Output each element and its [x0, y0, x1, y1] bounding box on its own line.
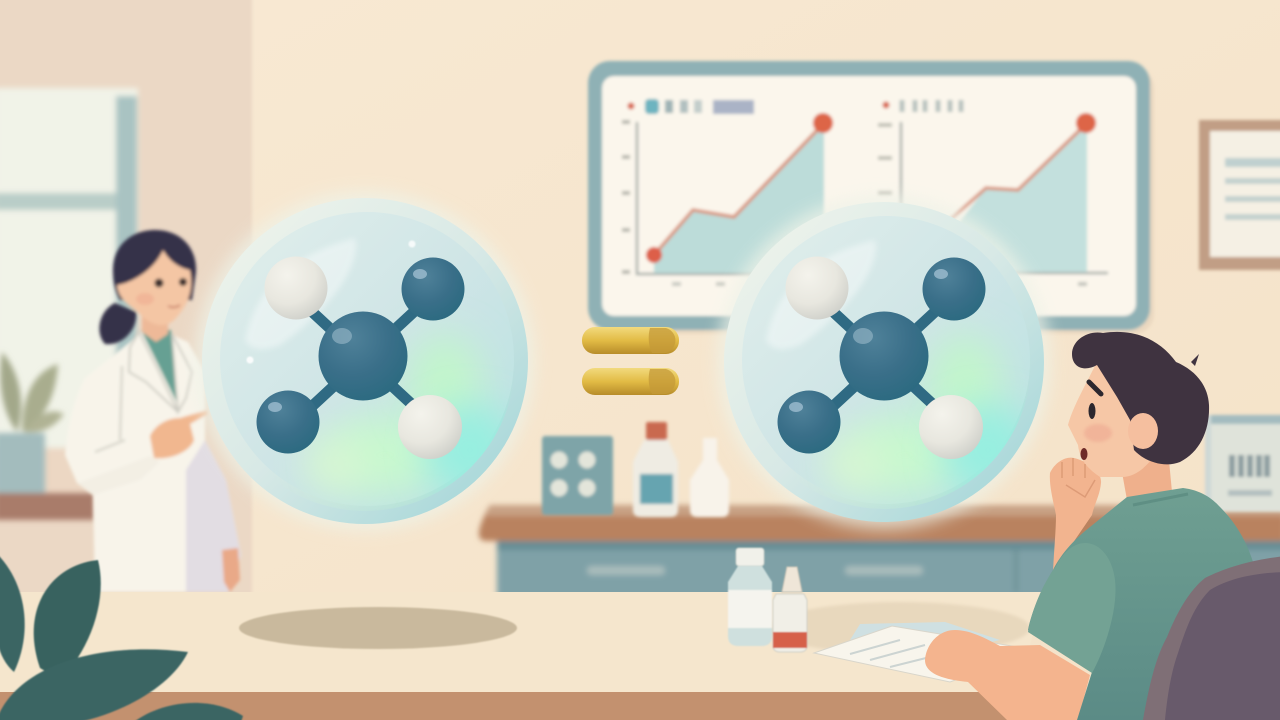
shirt [1028, 488, 1280, 720]
right bubble [717, 195, 1051, 529]
teal top and neck [141, 330, 178, 405]
far right device [1205, 415, 1280, 512]
eyes [154, 278, 164, 288]
whiteboard with charts [588, 61, 1154, 334]
head [1068, 357, 1171, 477]
molecule [256, 256, 464, 459]
face [117, 250, 191, 325]
desk shadow ovals [239, 607, 517, 649]
foreground desk [0, 592, 1043, 720]
hair back [113, 230, 196, 300]
sleeve [1028, 543, 1116, 673]
equals sign [582, 327, 679, 395]
dropper bottle [773, 567, 807, 652]
foreground plant [0, 552, 243, 720]
scientist in lab coat [65, 230, 241, 592]
hair [1072, 332, 1209, 464]
lower hand [222, 548, 240, 592]
chair [1143, 556, 1280, 720]
neck [1118, 450, 1172, 500]
medicine bottle [728, 548, 772, 646]
molecule [778, 256, 986, 459]
lapels [129, 332, 192, 412]
white bottle [690, 438, 729, 517]
papers on desk [814, 622, 1036, 682]
window [0, 88, 138, 493]
cheeks and mouth [136, 293, 154, 305]
framed notice [1199, 120, 1280, 270]
left wall section [0, 0, 252, 600]
plant on left shelf [0, 352, 95, 520]
items on back counter [542, 422, 729, 517]
fist fingers [1062, 458, 1095, 497]
right chart [878, 100, 1108, 284]
mouth [1080, 448, 1088, 460]
left bubble [195, 191, 535, 531]
lower arm and hand [925, 630, 1090, 720]
left chart [622, 99, 833, 284]
seated man [925, 332, 1280, 720]
back counter and cabinets [479, 505, 1280, 600]
eye and brow [1088, 403, 1096, 419]
pointing hand [150, 410, 208, 458]
bottle [633, 422, 678, 517]
foreground bottles on desk [728, 548, 807, 652]
ear [1128, 413, 1158, 449]
box with dots [542, 436, 613, 515]
raised forearm and fist [1050, 458, 1101, 572]
ponytail [99, 303, 136, 344]
lab coat [65, 332, 241, 592]
